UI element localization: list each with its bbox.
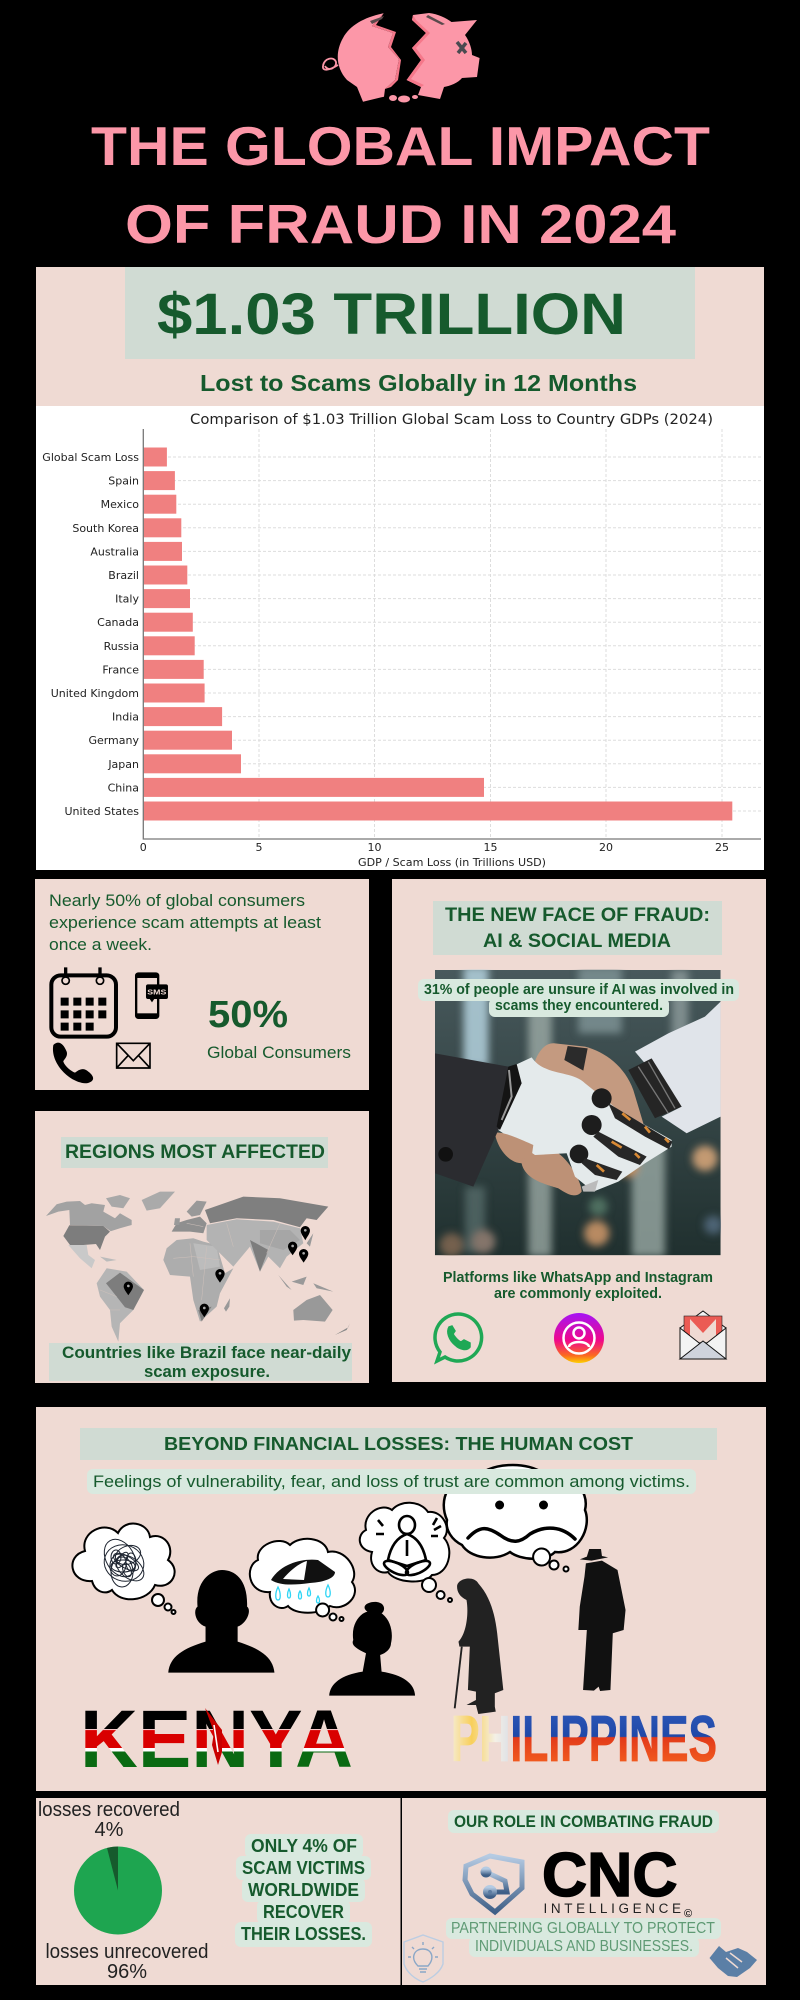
pie label: unrecovered: losses unrecovered [46, 1941, 208, 1963]
bar chart: scam loss vs GDP: 15 [484, 841, 498, 854]
bar chart: scam loss vs GDP: India [112, 711, 139, 724]
heading [445, 904, 710, 952]
bar chart: scam loss vs GDP [36, 406, 764, 870]
heading: BEYOND FINANCIAL LOSSES: THE HUMAN COST [164, 1433, 634, 1454]
tagline: PARTNERING GLOBALLY TO PROTECT [451, 1920, 715, 1937]
logo: CNC wordmark: © [684, 1908, 692, 1920]
headline subtitle: Lost to Scams Globally in 12 Months [200, 370, 637, 396]
thought clouds [72, 1465, 587, 1621]
bar chart: scam loss vs GDP: 10 [368, 841, 382, 854]
title: THE GLOBAL IMPACT [91, 116, 710, 177]
panel: our role in combating fraud [402, 1798, 766, 1985]
KENYA flag lettering: KENYA [80, 1694, 353, 1785]
heading: THE NEW FACE OF FRAUD: [445, 904, 710, 926]
bar chart: scam loss vs GDP: Italy [115, 593, 139, 606]
callout: only 4% recover: THEIR LOSSES. [241, 1923, 366, 1944]
panel: AI and social media [392, 879, 766, 1382]
heading: AI & SOCIAL MEDIA [483, 930, 671, 952]
bar chart: scam loss vs GDP: Russia [104, 640, 139, 653]
pie label: recovered: 4% [95, 1819, 124, 1841]
platforms text: Platforms like WhatsApp and Instagram [443, 1270, 713, 1286]
panel: regions most affected [35, 1111, 369, 1383]
bar chart: scam loss vs GDP: 20 [599, 841, 613, 854]
pie label: recovered: losses recovered [38, 1799, 180, 1821]
bar chart: scam loss vs GDP: Japan [107, 758, 139, 771]
pie label: unrecovered: 96% [107, 1961, 147, 1983]
map caption: Countries like Brazil face near-daily [62, 1343, 352, 1362]
panel: the human cost [36, 1407, 766, 1791]
callout: only 4% recover: ONLY 4% OF [251, 1835, 357, 1856]
icons: calendar, phone, envelope: SMS [147, 988, 166, 997]
intro text: once a week. [49, 935, 152, 954]
intro text: experience scam attempts at least [49, 913, 321, 932]
icon: WhatsApp [435, 1314, 482, 1361]
callout: only 4% recover: WORLDWIDE [248, 1879, 359, 1900]
logo: CNC wordmark: INTELLIGENCE [544, 1901, 681, 1916]
callout: only 4% recover: RECOVER [263, 1901, 344, 1922]
callout: 31% unsure: 31% of people are unsure if AI was involved in [424, 982, 734, 998]
platforms text [443, 1270, 713, 1302]
tagline [446, 1918, 721, 1957]
map caption: scam exposure. [144, 1362, 270, 1381]
headline amount: $1.03 TRILLION [157, 282, 626, 347]
bar chart: scam loss vs GDP: Mexico [101, 498, 139, 511]
intro text: Nearly 50% of global consumers [49, 891, 305, 910]
world map with pins [46, 1192, 350, 1342]
heading: OUR ROLE IN COMBATING FRAUD [454, 1813, 713, 1831]
bar chart: scam loss vs GDP: China [108, 781, 139, 794]
photo: robot and human handshake [435, 967, 723, 1257]
x axis label: GDP / Scam Loss (in Trillions USD) [358, 857, 546, 869]
callout: only 4% recover: SCAM VICTIMS [242, 1857, 365, 1878]
heading [80, 1428, 717, 1460]
panel: losses recovered [36, 1798, 400, 1985]
cloud 4 anxious face [468, 1500, 575, 1541]
title [91, 116, 710, 255]
bar chart: scam loss vs GDP: Canada [97, 616, 139, 629]
cloud 3 meditating figure [376, 1516, 441, 1578]
callout: only 4% recover [235, 1834, 372, 1947]
bar chart: scam loss vs GDP: 25 [715, 841, 729, 854]
bar chart: scam loss vs GDP: Australia [90, 545, 139, 558]
bar chart: scam loss vs GDP: 0 [140, 841, 147, 854]
platforms text: are commonly exploited. [494, 1286, 662, 1302]
subtitle: Feelings of vulnerability, fear, and loss of trust are common among victims. [93, 1472, 690, 1491]
bar chart: scam loss vs GDP: France [102, 663, 139, 676]
silhouettes of victims [168, 1549, 626, 1714]
tagline: INDIVIDUALS AND BUSINESSES. [475, 1938, 693, 1955]
bar chart: scam loss vs GDP: Global Scam Loss [42, 451, 139, 464]
callout: 31% unsure [418, 979, 739, 1017]
pie chart [74, 1846, 162, 1934]
bar chart: scam loss vs GDP: United Kingdom [51, 687, 139, 700]
bar chart: scam loss vs GDP: South Korea [72, 522, 139, 535]
cloud 2 crying eye [271, 1560, 335, 1603]
title: OF FRAUD IN 2024 [125, 194, 677, 255]
cloud 1 scribble [98, 1534, 149, 1587]
icon: Instagram [554, 1313, 604, 1363]
map caption [49, 1343, 352, 1381]
logo: CNC shield [465, 1856, 522, 1912]
pie label: recovered [38, 1799, 180, 1841]
icon: lightbulb shield [404, 1935, 443, 1982]
stat label: Global Consumers [207, 1043, 351, 1062]
panel: headline figure [36, 267, 764, 406]
chart title: Comparison of $1.03 Trillion Global Scam Loss to Country GDPs (2024) [190, 412, 713, 428]
icon: handshake [710, 1946, 757, 1977]
bar chart: scam loss vs GDP: Spain [108, 475, 139, 488]
callout: 31% unsure: scams they encountered. [495, 998, 663, 1014]
bar chart: scam loss vs GDP: Brazil [108, 569, 139, 582]
icons: calendar, phone, envelope [51, 967, 168, 1083]
panel: 50% of global consumers [35, 879, 369, 1090]
stat: 50%: 50% [208, 994, 288, 1036]
heading: REGIONS MOST AFFECTED [65, 1141, 325, 1163]
logo: CNC wordmark: CNC [542, 1841, 678, 1910]
bar chart: scam loss vs GDP: United States [64, 805, 139, 818]
intro text [49, 891, 321, 954]
icon: Gmail envelope [680, 1311, 726, 1359]
bar chart: scam loss vs GDP: Germany [88, 734, 139, 747]
bar chart: scam loss vs GDP: 5 [256, 841, 262, 854]
icon: broken piggy bank [323, 13, 480, 102]
pie label: unrecovered [46, 1941, 208, 1983]
